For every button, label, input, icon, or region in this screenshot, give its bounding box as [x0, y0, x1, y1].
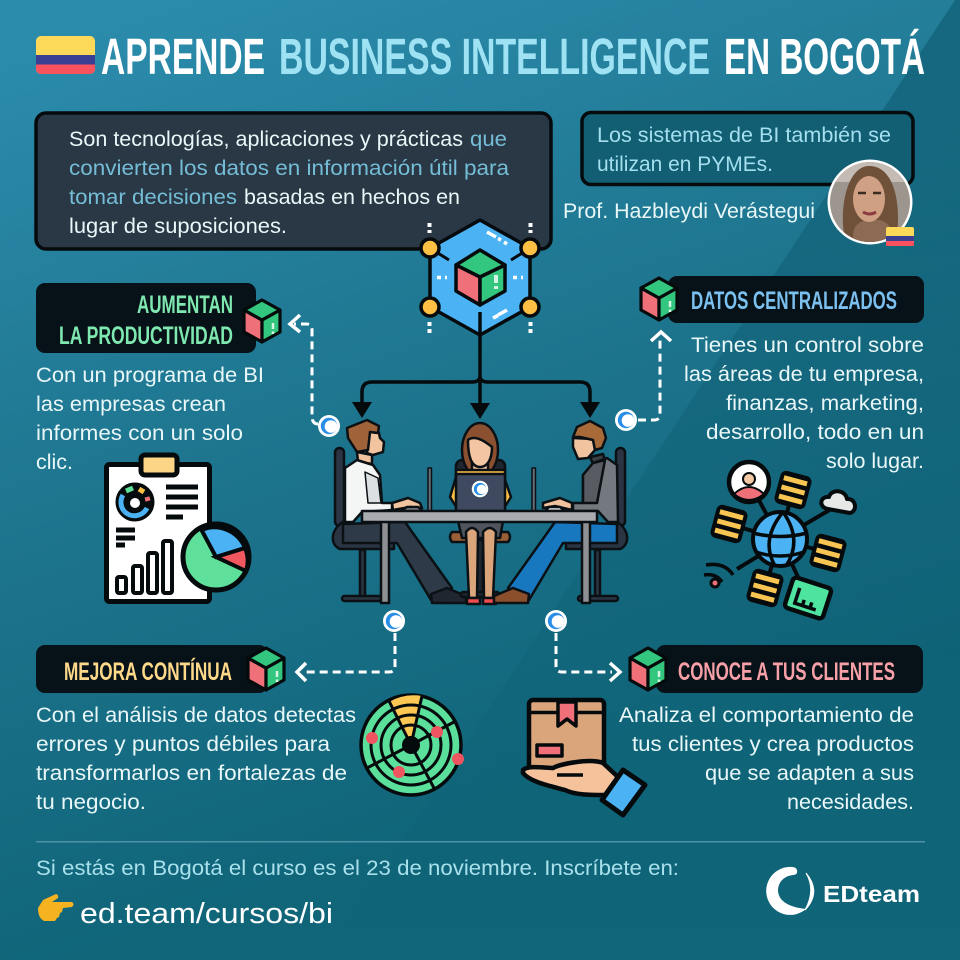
- text: clientes: necesidades.: [787, 791, 914, 814]
- text: datos centralizados: [684, 334, 924, 473]
- heading: datos centralizados: [641, 276, 924, 323]
- icon: pointing hand: [38, 894, 74, 921]
- icon: small Colombia flag: [886, 227, 914, 246]
- heading: aumentan la productividad: [36, 283, 280, 353]
- footer link: ed.team/cursos/bi: [80, 898, 333, 930]
- logo: EDteam: EDteam: [823, 881, 920, 907]
- panel: definition: [36, 113, 551, 249]
- table: [362, 511, 597, 603]
- text: mejora contínua: tu negocio.: [36, 791, 146, 814]
- icon: central BI hexagon: [421, 220, 539, 335]
- arrows: hexagon to people: [352, 312, 600, 419]
- heading: aumentan la productividad: AUMENTAN: [137, 291, 233, 319]
- person: woman with laptop: [450, 423, 511, 604]
- text: productividad: clic.: [36, 451, 73, 474]
- panel: definition: convierten los datos en información útil para: [69, 157, 509, 180]
- title: BUSINESS INTELLIGENCE: [279, 28, 710, 85]
- panel: definition: Son tecnologías, aplicaciones y prácticas: [69, 128, 463, 151]
- text: productividad: [36, 364, 264, 474]
- panel: definition: lugar de suposiciones.: [69, 215, 287, 238]
- professor name: Prof. Hazbleydi Verástegui: [563, 200, 815, 223]
- heading: mejora contínua: [36, 645, 284, 693]
- panel: PYMEs note: utilizan en PYMEs.: [597, 153, 773, 176]
- icon: Colombia flag: [36, 36, 95, 74]
- text: mejora contínua: [36, 704, 356, 814]
- heading: aumentan la productividad: LA PRODUCTIVIDAD: [59, 322, 233, 350]
- footer text: Si estás en Bogotá el curso es el 23 de noviembre. Inscríbete en:: [36, 857, 679, 880]
- logo: EDteam: [766, 867, 920, 915]
- text: clientes: tus clientes y crea productos: [632, 733, 914, 756]
- icon: laptop logo: [472, 481, 488, 497]
- text: datos centralizados: finanzas, marketing,: [726, 392, 924, 415]
- text: productividad: informes con un solo: [36, 422, 243, 445]
- text: datos centralizados: solo lugar.: [826, 450, 924, 473]
- panel: PYMEs note: Los sistemas de BI también se: [597, 124, 891, 147]
- panel: PYMEs note: [582, 112, 913, 184]
- icon: professor portrait: [828, 160, 912, 244]
- text: clientes: [619, 704, 914, 814]
- text: datos centralizados: las áreas de tu empresa,: [684, 363, 924, 386]
- arrow: to mejora: [297, 610, 405, 681]
- icon: centralised data network: [704, 462, 855, 619]
- person: man in grey sweater: [494, 421, 627, 603]
- side laptops: [428, 468, 536, 511]
- footer divider: [36, 841, 925, 842]
- text: datos centralizados: Tienes un control sobre: [691, 334, 924, 357]
- text: mejora contínua: Con el análisis de datos detectas: [36, 704, 356, 727]
- arrow: to datos: [615, 332, 671, 431]
- panel: definition: basadas en hechos en: [244, 186, 460, 209]
- heading: conoce a tus clientes: [630, 645, 923, 693]
- person: man in white shirt: [333, 420, 466, 603]
- heading: mejora contínua: MEJORA CONTÍNUA: [64, 657, 232, 686]
- icon: radar: [361, 695, 464, 795]
- arrow: to clientes: [545, 610, 620, 681]
- text: mejora contínua: transformarlos en fortalezas de: [36, 762, 347, 785]
- text: clientes: Analiza el comportamiento de: [619, 704, 914, 727]
- panel: definition: tomar decisiones: [69, 186, 237, 209]
- panel: definition: que: [470, 128, 507, 151]
- text: productividad: las empresas crean: [36, 393, 226, 416]
- arrow: to productividad: [290, 315, 340, 437]
- text: mejora contínua: errores y puntos débiles para: [36, 733, 330, 756]
- text: productividad: Con un programa de BI: [36, 364, 264, 387]
- illustration: three people at a table: [333, 420, 627, 604]
- text: datos centralizados: desarrollo, todo en un: [706, 421, 924, 444]
- text: clientes: que se adapten a sus: [705, 762, 914, 785]
- title: APRENDE: [101, 28, 265, 85]
- icon: clipboard report: [106, 455, 249, 602]
- icon: box on a hand: [523, 700, 645, 815]
